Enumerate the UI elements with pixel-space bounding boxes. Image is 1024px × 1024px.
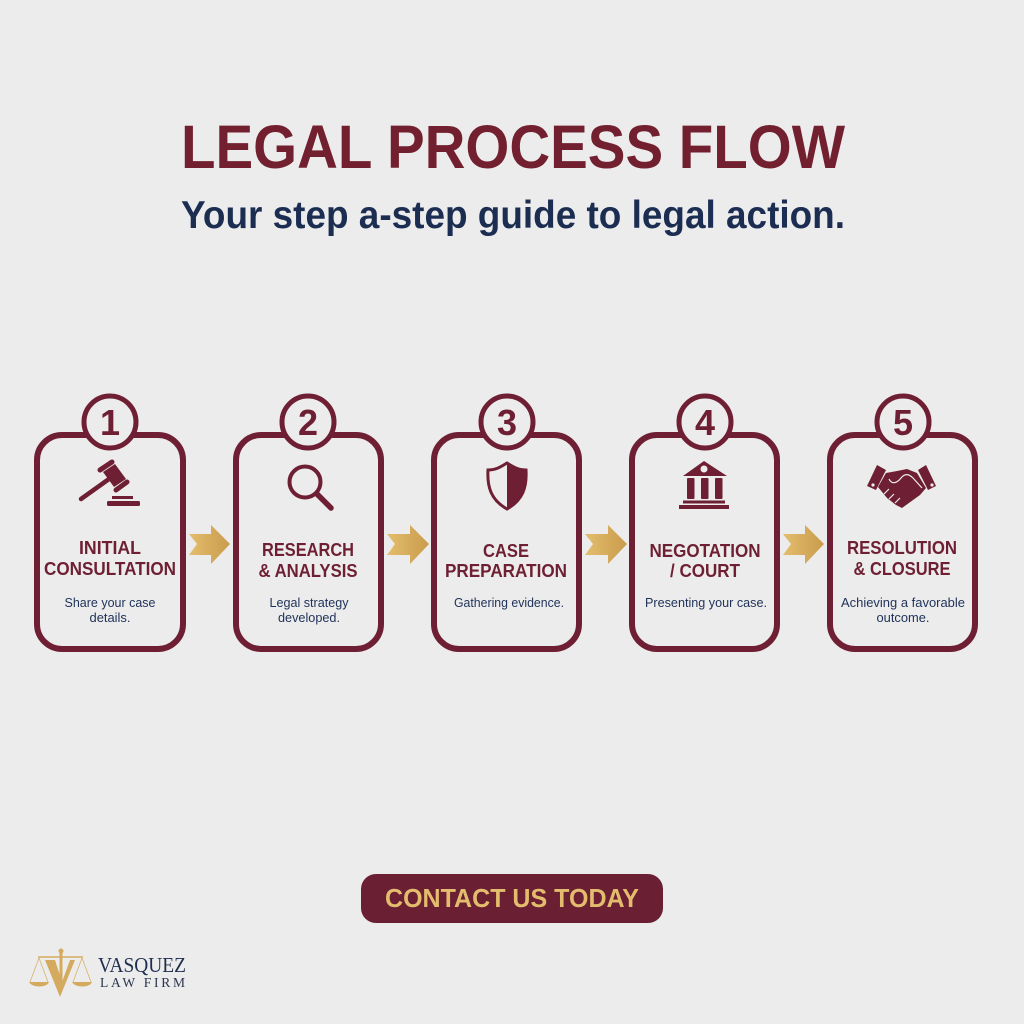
heading: NEGOTATION	[650, 540, 760, 561]
logo: Vasquez Law Firm: LAW FIRM	[100, 975, 185, 990]
panel: step 2 research and analysis	[236, 396, 381, 649]
heading: RESOLUTION	[847, 537, 957, 558]
icon: handshake	[867, 465, 936, 508]
number badge 3: 3	[497, 402, 517, 443]
icon: magnifying glass	[290, 466, 331, 508]
subtitle: Your step a-step guide to legal action.	[181, 194, 845, 237]
panel: step 5 resolution and closure: outcome.	[876, 611, 930, 625]
button: contact us today	[361, 874, 663, 923]
panel: step 4 negotiation or court	[632, 396, 777, 649]
number badge 1: 1	[100, 402, 120, 443]
panel: step 4 negotiation or court: / COURT	[670, 560, 741, 581]
description: Gathering evidence.	[454, 596, 564, 610]
icon: gavel	[81, 462, 140, 506]
panel: step 5 resolution and closure: & CLOSURE	[854, 558, 950, 579]
heading: CASE	[483, 540, 529, 561]
number badge 4: 4	[695, 402, 715, 443]
button: contact us today: CONTACT US TODAY	[385, 883, 639, 913]
heading: INITIAL	[79, 537, 141, 558]
number badge 5	[877, 396, 929, 448]
arrow 3	[585, 525, 627, 564]
description: Achieving a favorable	[841, 596, 965, 610]
number badge 2: 2	[298, 402, 318, 443]
description: Legal strategy	[270, 596, 349, 610]
icon: shield	[488, 463, 526, 509]
heading: RESEARCH	[262, 539, 354, 560]
number badge 1	[84, 396, 136, 448]
number badge 2	[282, 396, 334, 448]
description: Share your case	[64, 596, 156, 610]
number badge 4	[679, 396, 731, 448]
panel: step 2 research and analysis: developed.	[278, 611, 340, 625]
panel: step 1 initial consultation: details.	[90, 611, 130, 625]
number badge 3	[481, 396, 533, 448]
arrow 2	[387, 525, 429, 564]
arrow 1	[189, 525, 230, 564]
panel: step 1 initial consultation: CONSULTATION	[44, 558, 176, 579]
logo wordmark: VASQUEZ	[98, 953, 186, 977]
panel: step 3 case preparation: PREPARATION	[445, 560, 567, 581]
panel: step 5 resolution and closure	[830, 396, 975, 649]
logo: Vasquez Law Firm	[29, 949, 186, 997]
panel: step 3 case preparation	[434, 396, 579, 649]
icon: courthouse	[679, 461, 729, 509]
number badge 5: 5	[893, 402, 913, 443]
arrow 4	[783, 525, 824, 564]
panel: step 2 research and analysis: & ANALYSIS	[258, 560, 358, 581]
description: Presenting your case.	[645, 596, 767, 610]
panel: step 1 initial consultation	[37, 396, 183, 649]
icon: scales with V	[29, 949, 92, 997]
title: LEGAL PROCESS FLOW	[181, 113, 845, 181]
